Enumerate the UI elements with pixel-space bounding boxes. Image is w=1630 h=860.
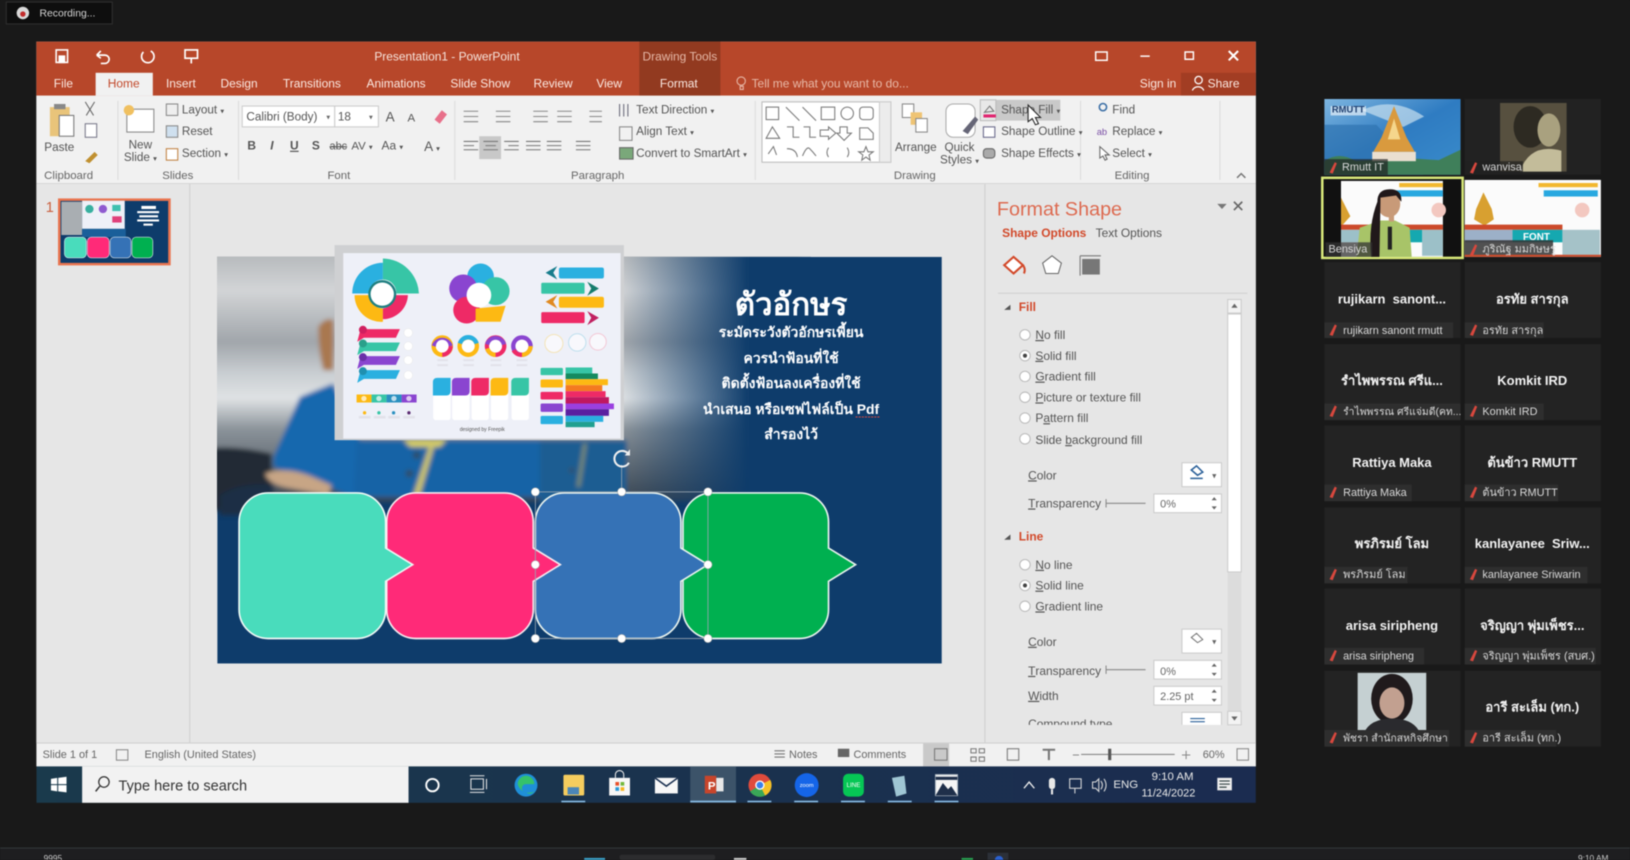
title bar: Drawing Tools bbox=[642, 49, 717, 63]
icon: collapse ribbon bbox=[1237, 174, 1245, 178]
tile: Rattiya Maka bbox=[1324, 425, 1461, 501]
selection frame and handles bbox=[531, 449, 712, 643]
fill section: Fill bbox=[1019, 300, 1036, 314]
photo fade into navy bbox=[622, 244, 748, 504]
tile: จริญญา bbox=[1465, 589, 1601, 664]
slide body text: ติดตั้งฟ้อนลงเครื่องที่ใช้ bbox=[722, 372, 861, 391]
fill section: No fill bbox=[1035, 328, 1065, 342]
drawing group: Shape Effects ▾ bbox=[1001, 147, 1081, 160]
font group: A bbox=[407, 113, 415, 125]
tile: พรภิรมย์: พรภิรมย์ โลม bbox=[1355, 535, 1429, 551]
cabin photo bbox=[216, 256, 744, 518]
tile: ต้นข้าว RMUTT bbox=[1465, 425, 1601, 501]
font group: B bbox=[247, 139, 256, 153]
line section: Width bbox=[1028, 689, 1059, 703]
icon: zoom bbox=[794, 773, 819, 802]
window controls bbox=[1096, 51, 1238, 60]
font group: abc bbox=[330, 141, 348, 153]
editing group: Find bbox=[1112, 103, 1135, 116]
tile: ต้นข้าว RMUTT: ต้นข้าว RMUTT bbox=[1482, 487, 1558, 499]
font group bbox=[242, 106, 447, 182]
tile: Rmutt IT: RMUTT bbox=[1332, 104, 1365, 114]
system tray: ENG bbox=[1113, 779, 1138, 791]
freepik credit: designed by Freepik bbox=[460, 427, 505, 433]
format shape pane bbox=[984, 184, 1256, 744]
fill section: Gradient fill bbox=[1035, 370, 1096, 384]
icon: line: LINE bbox=[847, 782, 860, 789]
status bar: Notes bbox=[789, 749, 818, 761]
slides group: Slides bbox=[162, 170, 194, 182]
title bar bbox=[36, 42, 1256, 96]
icon: chrome bbox=[747, 774, 772, 802]
editing group: Select ▾ bbox=[1112, 147, 1152, 160]
system tray: 11/24/2022 bbox=[1142, 788, 1195, 800]
icon: file explorer bbox=[561, 775, 585, 802]
clipboard group bbox=[44, 102, 98, 182]
presenter bbox=[1357, 189, 1412, 257]
icon: zoom: zoom bbox=[800, 783, 814, 789]
arrange and quick styles: Arrange bbox=[895, 141, 937, 154]
ribbon dividers bbox=[117, 101, 1220, 180]
fill section: ▾ bbox=[1212, 470, 1216, 480]
tile: รำไพพรรณ: รำไพพรรณ ศรีแจ่มดี(คท... bbox=[1343, 405, 1461, 418]
search box bbox=[82, 766, 409, 803]
font group: ▾ bbox=[326, 113, 330, 122]
tile: อรทัย: อรทัย สารกุล bbox=[1496, 292, 1569, 308]
line section: 2.25 pt bbox=[1160, 691, 1193, 703]
drawing group: Drawing bbox=[894, 170, 936, 182]
PowerPoint window bbox=[1, 1, 1256, 803]
editing group: Replace ▾ bbox=[1112, 125, 1163, 138]
slide title: ตัวอักษร bbox=[735, 287, 848, 322]
font group: Font bbox=[327, 170, 351, 182]
flag list bbox=[357, 326, 413, 383]
tile: wanvisa: wanvisa bbox=[1481, 162, 1523, 174]
line section: No line bbox=[1035, 558, 1073, 572]
line section: Color bbox=[1028, 635, 1057, 649]
title bar: Review bbox=[533, 76, 573, 90]
icon: line bbox=[841, 774, 865, 802]
format shape pane: Text Options bbox=[1096, 226, 1162, 240]
participants panel bbox=[1322, 99, 1601, 747]
editing group: Editing bbox=[1115, 170, 1150, 182]
slide body text bbox=[703, 321, 880, 442]
font group: A ▾ bbox=[424, 139, 440, 154]
system tray bbox=[1024, 771, 1232, 800]
icon: powerpoint: P bbox=[708, 780, 716, 792]
slide body text: นำเสนอ หรือเซฟไฟล์เป็น Pdf bbox=[703, 400, 880, 417]
title bar: Design bbox=[221, 76, 258, 90]
tile: พัชรา with photo: พัชรา สำนักสหกิจศึกษา bbox=[1343, 732, 1448, 744]
pane scrolling body bbox=[1004, 300, 1221, 733]
clipboard group: Clipboard bbox=[44, 170, 93, 182]
arrange and quick styles: Quick bbox=[944, 141, 975, 154]
tile: Komkit IRD bbox=[1465, 344, 1601, 420]
clipboard group: Paste bbox=[44, 141, 74, 154]
font group: I bbox=[270, 139, 274, 153]
tile: พรภิรมย์ bbox=[1324, 507, 1461, 583]
tile: slide share participant bbox=[1465, 180, 1601, 257]
icon: task view bbox=[470, 776, 487, 792]
arrow box: green bbox=[683, 493, 856, 639]
tile: Komkit IRD: Komkit IRD bbox=[1482, 406, 1538, 418]
title bar: Insert bbox=[166, 76, 196, 90]
title bar: Animations bbox=[367, 76, 426, 90]
tile: Rmutt IT bbox=[1324, 99, 1461, 175]
line section: Line bbox=[1019, 530, 1044, 544]
ribbon bbox=[36, 96, 1256, 184]
slide thumbnail bbox=[59, 200, 169, 264]
icon: mail bbox=[655, 778, 678, 793]
tile: รำไพพรรณ: รำไพพรรณ ศรีแ... bbox=[1341, 372, 1443, 388]
ring row bbox=[434, 337, 531, 365]
windows taskbar bbox=[36, 766, 1256, 803]
title bar: Slide Show bbox=[450, 76, 510, 90]
icon: powerpoint bbox=[690, 766, 736, 803]
font group: S bbox=[312, 139, 320, 153]
tile: ต้นข้าว RMUTT: ต้นข้าว RMUTT bbox=[1487, 455, 1577, 470]
line section: 0% bbox=[1160, 666, 1176, 678]
line section bbox=[1004, 530, 1221, 733]
attendants drawn in zoomed coordinates bbox=[200, 319, 627, 515]
paragraph group: Align Text ▾ bbox=[636, 125, 694, 138]
slides group: Reset bbox=[182, 125, 213, 138]
font group: AV ▾ bbox=[351, 141, 373, 153]
slides group: New bbox=[129, 139, 153, 152]
speech cards bbox=[433, 378, 529, 420]
font group: ▾ bbox=[369, 113, 373, 122]
line section: Transparency bbox=[1028, 664, 1101, 678]
tile: จริญญา: จริญญา พุ่มเพ็ชร... bbox=[1480, 616, 1584, 634]
slide body text: สำรองไว้ bbox=[764, 425, 818, 442]
pasted infographic reference image bbox=[335, 245, 624, 440]
segmented donut bbox=[352, 258, 419, 322]
tile: Komkit IRD: Komkit IRD bbox=[1497, 373, 1567, 388]
window body bbox=[36, 42, 1256, 766]
stacked bars bbox=[541, 367, 614, 427]
shape fill highlighted button: Shape Fill ▾ bbox=[1001, 103, 1061, 116]
tile: อรทัย: อรทัย สารกุล bbox=[1482, 325, 1543, 337]
shape fill highlighted button bbox=[980, 100, 1061, 121]
tile: arisa: arisa siripheng bbox=[1346, 618, 1438, 633]
tile: active speaker Bensiya: Bensiya bbox=[1329, 244, 1368, 256]
tile: arisa bbox=[1324, 589, 1461, 664]
icon: notes app bbox=[888, 776, 912, 802]
host desktop taskbar strip bbox=[0, 848, 1630, 860]
title bar: View bbox=[596, 76, 622, 90]
icon: photos bbox=[935, 775, 958, 802]
slide body text: ระมัดระวังตัวอักษรเพี้ยน bbox=[719, 321, 864, 340]
icon: windows logo bbox=[51, 777, 67, 792]
title bar: Home bbox=[108, 76, 140, 90]
status bar: English (United States) bbox=[144, 749, 256, 761]
icon: store bbox=[609, 771, 630, 796]
icon: save bbox=[56, 50, 68, 62]
title bar: Sign in bbox=[1140, 76, 1176, 90]
fill section bbox=[1004, 300, 1221, 513]
recording indicator bbox=[6, 2, 112, 24]
arrow box: teal bbox=[239, 493, 413, 639]
icon: undo and redo bbox=[97, 50, 198, 63]
fill section: Color bbox=[1028, 468, 1057, 482]
tile: อารี bbox=[1465, 671, 1601, 747]
arrow box: pink bbox=[387, 493, 560, 639]
title bar: Transitions bbox=[283, 76, 341, 90]
line section: ▾ bbox=[1212, 637, 1216, 647]
icon: share person bbox=[1192, 76, 1204, 90]
icon: size and properties bbox=[1080, 256, 1101, 276]
tile: slide share participant: ภูริณัฐ มมกิษษรู bbox=[1482, 244, 1556, 256]
ribbon arrows bbox=[541, 266, 604, 325]
paragraph group: Convert to SmartArt ▾ bbox=[636, 147, 747, 160]
fill section: Slide background fill bbox=[1035, 433, 1142, 447]
paragraph group bbox=[464, 103, 747, 182]
font group: U bbox=[290, 139, 299, 153]
format shape pane: Shape Options bbox=[1002, 226, 1087, 240]
font group: A bbox=[386, 110, 395, 125]
line section: Solid line bbox=[1035, 579, 1084, 593]
tile: จริญญา: จริญญา พุ่มเพ็ชร (สบศ.) bbox=[1482, 648, 1595, 662]
tile: wanvisa bbox=[1465, 99, 1601, 175]
pale circle stats bbox=[545, 333, 606, 352]
system tray: 9:10 AM bbox=[1152, 771, 1194, 783]
icon: mouse cursor bbox=[1028, 105, 1041, 125]
fill section: Solid fill bbox=[1035, 349, 1077, 363]
icon: cortana bbox=[426, 779, 439, 791]
search box: Type here to search bbox=[119, 778, 247, 794]
drawing group: Shape Outline ▾ bbox=[1001, 125, 1083, 138]
tile: kanlayanee bbox=[1465, 507, 1601, 583]
icon: edge bbox=[515, 774, 537, 797]
slides group bbox=[124, 103, 228, 182]
icon: fill bucket bbox=[1004, 257, 1025, 273]
status bar bbox=[36, 742, 1256, 766]
editing group bbox=[1097, 103, 1163, 182]
paragraph group: Text Direction ▾ bbox=[636, 103, 715, 116]
slides group: Slide ▾ bbox=[124, 151, 157, 164]
fill section: Transparency bbox=[1028, 496, 1101, 510]
pentagon flower bbox=[449, 263, 510, 323]
fill section: Pattern fill bbox=[1035, 411, 1088, 425]
font group: Aa ▾ bbox=[382, 139, 403, 153]
tile: rujikarn: rujikarn sanont rmutt bbox=[1343, 325, 1442, 337]
fill section: Picture or texture fill bbox=[1035, 390, 1141, 404]
title bar: Share bbox=[1208, 76, 1240, 90]
tile: kanlayanee: kanlayanee Sriw... bbox=[1475, 536, 1590, 551]
tile: Rattiya Maka: Rattiya Maka bbox=[1343, 487, 1408, 499]
drawing group bbox=[762, 100, 1083, 182]
status bar: Slide 1 of 1 bbox=[43, 749, 97, 761]
tile: อารี: อารี สะเล็ม (ทก.) bbox=[1482, 730, 1561, 744]
title bar: Format bbox=[660, 76, 698, 90]
tile: อรทัย bbox=[1465, 262, 1601, 338]
arrange and quick styles: Styles ▾ bbox=[940, 153, 979, 166]
font group: Calibri (Body) bbox=[246, 111, 318, 124]
tile: rujikarn: rujikarn sanont... bbox=[1338, 292, 1446, 307]
icon: tell me bulb bbox=[737, 77, 745, 89]
format shape pane: Format Shape bbox=[997, 198, 1122, 220]
slide bbox=[216, 256, 942, 664]
tile: Rattiya Maka: Rattiya Maka bbox=[1352, 455, 1432, 470]
tile: rujikarn bbox=[1324, 262, 1461, 338]
tile: พัชรา with photo bbox=[1324, 671, 1461, 747]
shapes gallery bbox=[762, 102, 891, 162]
title bar: File bbox=[54, 76, 73, 90]
font group: 18 bbox=[338, 111, 351, 124]
tile: arisa: arisa siripheng bbox=[1343, 650, 1414, 662]
arrange and quick styles bbox=[895, 104, 979, 166]
paragraph group: Paragraph bbox=[571, 170, 624, 182]
tile: Rmutt IT: Rmutt IT bbox=[1342, 162, 1384, 174]
fill section: 0% bbox=[1160, 498, 1176, 510]
line section: Compound type bbox=[1028, 717, 1113, 731]
status bar: 60% bbox=[1203, 749, 1225, 761]
icon: pentagon effects bbox=[1043, 256, 1061, 273]
slides group: Layout ▾ bbox=[182, 103, 224, 116]
thumbnail pane: 1 bbox=[46, 200, 54, 216]
recording indicator: Recording... bbox=[40, 9, 95, 20]
slide body text: ควรนำฟ้อนที่ใช้ bbox=[744, 348, 839, 366]
title bar: Presentation1 - PowerPoint bbox=[374, 49, 520, 63]
tile: slide share participant: FONT bbox=[1523, 232, 1550, 243]
tile: พรภิรมย์: พรภิรมย์ โลม bbox=[1343, 568, 1406, 581]
tile: อารี: อารี สะเล็ม (ทก.) bbox=[1485, 697, 1579, 714]
tile: active speaker Bensiya bbox=[1322, 178, 1463, 258]
pane scrollbar bbox=[1228, 299, 1241, 725]
line section: Gradient line bbox=[1035, 599, 1103, 613]
timeline strip bbox=[357, 394, 417, 417]
editing group: ab bbox=[1097, 127, 1107, 137]
status bar: Comments bbox=[853, 749, 907, 761]
tile: รำไพพรรณ bbox=[1324, 344, 1461, 420]
arrow box: blue bbox=[535, 493, 708, 639]
tile: kanlayanee: kanlayanee Sriwarin bbox=[1482, 569, 1581, 581]
slides group: Section ▾ bbox=[182, 147, 228, 160]
title bar: Tell me what you want to do... bbox=[752, 76, 909, 90]
thumbnail pane bbox=[36, 184, 190, 744]
